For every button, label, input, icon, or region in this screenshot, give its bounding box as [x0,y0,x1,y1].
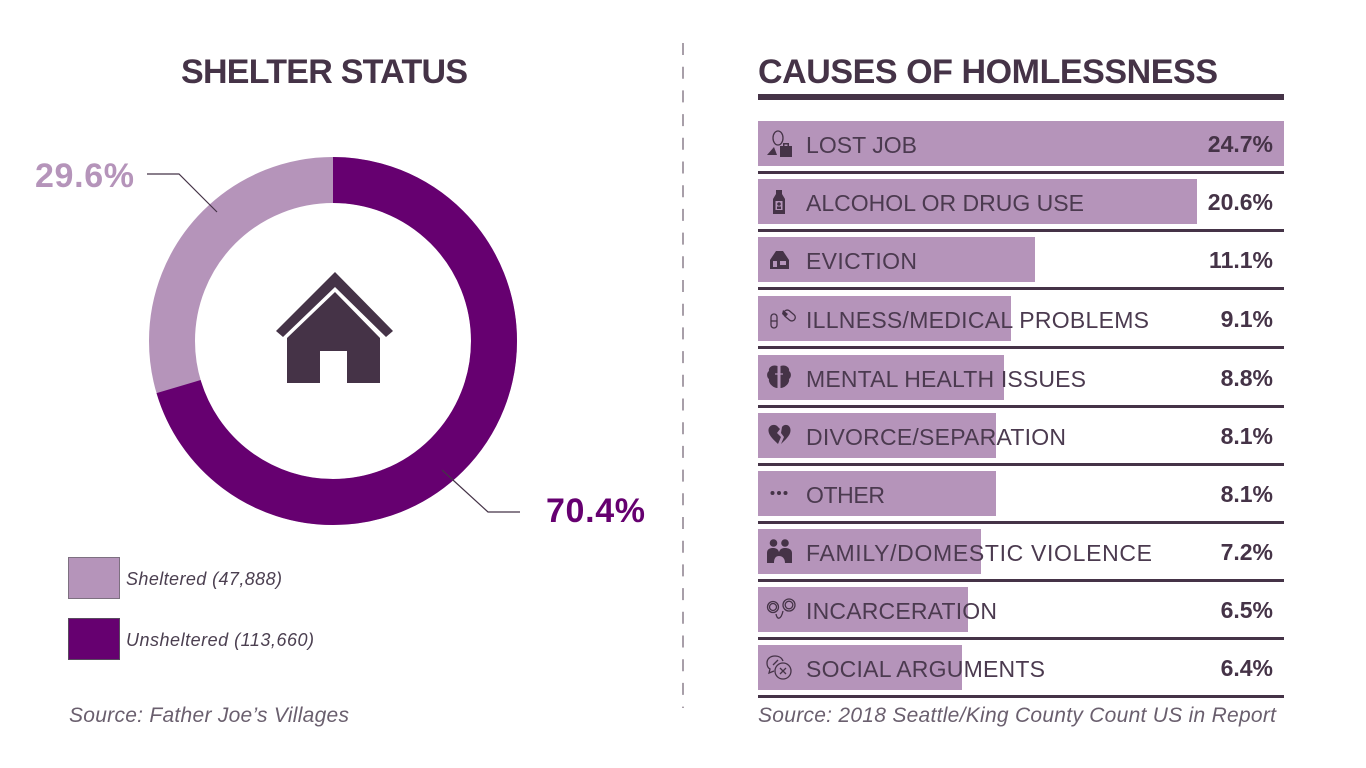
row: illness/medical problems: ILLNESS/MEDICAL PROBLEMS [806,307,1149,333]
row: social arguments [758,645,1273,690]
row: eviction: 11.1% [1209,247,1273,273]
source: causes: Source: 2018 Seattle/King County Count US in Report [758,704,1277,727]
legend [68,558,314,660]
donut chart [172,180,494,502]
panel: shelter status [35,53,645,727]
row: alcohol or drug use: ALCOHOL OR DRUG USE [806,190,1084,216]
legend item: sheltered [68,558,282,598]
row: family/domestic violence: FAMILY/DOMESTIC VIOLENCE [806,540,1152,566]
panel: causes of homelessness [758,53,1284,727]
row: incarceration [758,587,1273,632]
row: other: 8.1% [1221,481,1273,507]
row: social arguments: 6.4% [1221,655,1273,681]
row: lost job [758,121,1284,166]
callout: 70.4%: 70.4% [546,492,645,530]
row: family/domestic violence [758,529,1273,574]
row: family/domestic violence: 7.2% [1221,539,1273,565]
callout: 70.4% [442,470,645,530]
row: divorce/separation [758,413,1273,458]
legend item: unsheltered [68,618,314,660]
legend item: sheltered: Sheltered (47,888) [126,569,282,589]
icon: pills [771,309,797,328]
row: lost job: 24.7% [1208,131,1273,157]
icon: bottle [773,190,785,214]
heading: causes: CAUSES OF HOMLESSNESS [758,53,1218,91]
row: illness/medical problems [758,296,1273,341]
row: mental health issues: MENTAL HEALTH ISSUES [806,366,1086,392]
icon: speech bubbles [767,656,791,679]
row: other [758,471,1273,516]
icon: broken heart [768,425,791,444]
row: incarceration: INCARCERATION [806,598,997,624]
row: lost job: LOST JOB [806,132,917,158]
icon: brain [767,365,791,388]
row: other: OTHER [806,482,885,508]
row: eviction: EVICTION [806,248,917,274]
callout: 29.6%: 29.6% [35,157,134,195]
icon: handcuffs [768,599,795,618]
icon: dots [770,491,788,495]
row: divorce/separation: DIVORCE/SEPARATION [806,424,1066,450]
row: divorce/separation: 8.1% [1221,423,1273,449]
callout: 29.6% [35,157,217,212]
row: mental health issues: 8.8% [1221,365,1273,391]
row: alcohol or drug use [758,179,1273,224]
icon: person with briefcase [767,131,792,157]
row: eviction [758,237,1273,282]
legend item: unsheltered: Unsheltered (113,660) [126,630,314,650]
icon: family [767,539,792,563]
source: shelter status: Source: Father Joe’s Villages [69,704,350,727]
icon: house [276,272,393,383]
row: mental health issues [758,355,1273,400]
icon: home [770,251,789,269]
row: incarceration: 6.5% [1221,597,1273,623]
row: alcohol or drug use: 20.6% [1208,189,1273,215]
heading: shelter status: SHELTER STATUS [181,53,468,91]
row: illness/medical problems: 9.1% [1221,306,1273,332]
row: social arguments: SOCIAL ARGUMENTS [806,656,1045,682]
